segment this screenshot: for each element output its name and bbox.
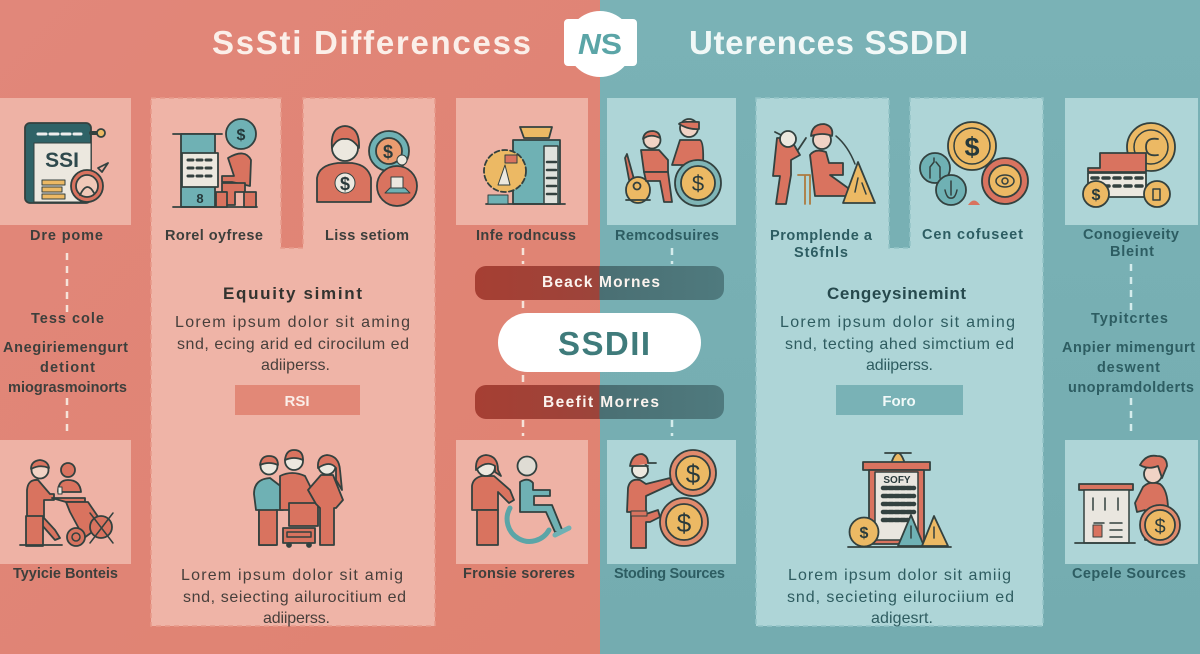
icon: building with gear xyxy=(484,127,565,204)
text block: left panel lower: snd, seiecting ailurocitium ed xyxy=(183,589,406,606)
icon: SSI book: SSI xyxy=(45,149,79,172)
tag: Foro: Foro xyxy=(882,393,916,410)
labels: left column text: Anegiriemengurt xyxy=(3,340,128,356)
panel: left card top 1 xyxy=(0,98,131,225)
badge: versus: NS xyxy=(578,29,622,61)
icon: person with dollar shirt and coin: $ xyxy=(340,174,350,194)
text block: right panel lower: snd, secieting eilurociium ed xyxy=(787,589,1014,606)
text block: right panel upper xyxy=(780,284,1015,374)
panel: right card bottom 4 xyxy=(1065,440,1198,564)
icon: caregiver and wheelchair user xyxy=(472,455,569,545)
text block: left panel upper xyxy=(175,284,410,374)
pill: bottom comparison bar: Beefit Morres xyxy=(543,394,659,411)
labels: right large panel captions xyxy=(770,227,1023,261)
panel: right card top 4 xyxy=(1065,98,1198,225)
labels: left column text: miograsmoinorts xyxy=(8,380,127,396)
panel: right SSDI background xyxy=(600,0,1200,654)
connector: dashed lines xyxy=(67,248,1131,436)
pill: top comparison bar: Beack Mornes xyxy=(542,274,660,291)
icon: building with coins xyxy=(1083,123,1175,207)
icon: SSI book xyxy=(25,123,108,203)
labels: left column text: Dre pome xyxy=(30,228,103,244)
text block: left panel upper: Equuity simint xyxy=(223,284,362,303)
text block: right panel lower: adigesrt. xyxy=(871,610,933,627)
panel: left card bottom 1 xyxy=(0,440,131,564)
text block: left panel upper: Lorem ipsum dolor sit aming xyxy=(175,314,410,331)
icon: tower with warning signs and coin: SOFY xyxy=(883,475,911,486)
panel: left card top 4 xyxy=(456,98,588,225)
labels: right column text: Typitcrtes xyxy=(1091,311,1168,327)
labels: left column text: detiont xyxy=(40,360,95,376)
text block: left panel lower: Lorem ipsum dolor sit amig xyxy=(181,567,403,584)
text block: left panel upper: snd, ecing arid ed cirocilum ed xyxy=(177,336,409,353)
panel: right card top 1 xyxy=(607,98,736,225)
tag: RSI: RSI xyxy=(284,393,310,410)
panel: left SSI background xyxy=(0,0,600,654)
icon: person at table with wheelchair xyxy=(20,460,113,546)
tag: Foro xyxy=(836,385,963,415)
labels: inner right column xyxy=(614,228,725,582)
text block: right panel upper: adiiperss. xyxy=(866,357,933,374)
tag: RSI xyxy=(235,385,360,415)
icon: coin cluster: $ xyxy=(964,132,980,162)
icon: person with dollar shirt and coin: $ xyxy=(383,142,393,162)
icon: presenter with board and coin xyxy=(1075,456,1180,545)
labels: right column text: deswent xyxy=(1097,360,1160,376)
text block: left panel upper: adiiperss. xyxy=(261,357,330,374)
icon: seated person and coin: $ xyxy=(692,171,704,196)
title: left heading: SsSti Differencess xyxy=(212,24,531,61)
icon: building with coins: $ xyxy=(1092,187,1101,204)
labels: left large panel captions: Rorel oyfrese xyxy=(165,228,263,244)
text block: left panel lower: adiiperss. xyxy=(263,610,330,627)
text block: right panel lower: Lorem ipsum dolor sit amiig xyxy=(788,567,1011,584)
text block: right panel upper: Lorem ipsum dolor sit aming xyxy=(780,314,1015,331)
labels: right column text: unopramdolderts xyxy=(1068,380,1194,396)
icon: ATM with person: 8 xyxy=(196,191,204,206)
text block: right panel lower xyxy=(787,567,1014,627)
panel: left large notched card xyxy=(151,98,435,626)
labels: right large panel captions: Cen cofuseet xyxy=(922,227,1023,243)
labels: left column text: Tyyicie Bonteis xyxy=(13,566,118,582)
labels: inner right column: Stoding Sources xyxy=(614,566,725,582)
pill: bottom comparison bar xyxy=(475,385,724,419)
labels: right column text: Cepele Sources xyxy=(1072,566,1186,582)
icon: seated person and coin xyxy=(625,119,721,206)
labels: left column text: Tess cole xyxy=(31,311,104,327)
icon: inspector with warning sign xyxy=(773,124,875,204)
labels: inner left column xyxy=(463,228,576,582)
labels: right column text: Anpier mimengurt xyxy=(1062,340,1195,356)
icon: person holding two coins: $ xyxy=(677,508,692,538)
panel: right card bottom 1 xyxy=(607,440,736,564)
labels: right large panel captions: Promplende a xyxy=(770,228,873,244)
labels: right large panel captions: St6fnls xyxy=(794,245,848,261)
icon: ATM with person xyxy=(173,119,257,207)
text block: right panel upper: Cengeysinemint xyxy=(827,284,966,303)
panel: left card bottom 4 xyxy=(456,440,588,564)
pill: center SSDII xyxy=(498,313,701,372)
labels: right column text: Conogieveity xyxy=(1083,227,1179,243)
title: right heading: Uterences SSDDI xyxy=(689,24,968,61)
labels: left column text xyxy=(3,228,128,582)
icon: person holding two coins: $ xyxy=(686,459,701,489)
text block: left panel lower xyxy=(181,567,406,627)
badge: versus xyxy=(564,11,637,77)
icon: ATM with person: $ xyxy=(237,127,246,144)
panel: right large notched card xyxy=(756,98,1043,626)
icon: group of three people xyxy=(254,450,343,547)
labels: inner left column: Infe rodncuss xyxy=(476,228,576,244)
icon: coin cluster xyxy=(920,122,1028,205)
text block: right panel upper: snd, tecting ahed simctium ed xyxy=(785,336,1014,353)
pill: top comparison bar xyxy=(475,266,724,300)
pill: center SSDII: SSDII xyxy=(558,325,650,362)
labels: left large panel captions: Liss setiom xyxy=(325,228,409,244)
labels: right column text: Bleint xyxy=(1110,244,1154,260)
icon: person with dollar shirt and coin xyxy=(317,126,417,206)
icon: presenter with board and coin: $ xyxy=(1154,516,1166,538)
labels: right column text xyxy=(1062,227,1195,582)
icon: person holding two coins xyxy=(627,450,716,548)
labels: inner right column: Remcodsuires xyxy=(615,228,719,244)
labels: inner left column: Fronsie soreres xyxy=(463,566,575,582)
labels: left large panel captions xyxy=(165,228,409,244)
icon: tower with warning signs and coin xyxy=(848,453,951,547)
icon: tower with warning signs and coin: $ xyxy=(860,525,869,542)
